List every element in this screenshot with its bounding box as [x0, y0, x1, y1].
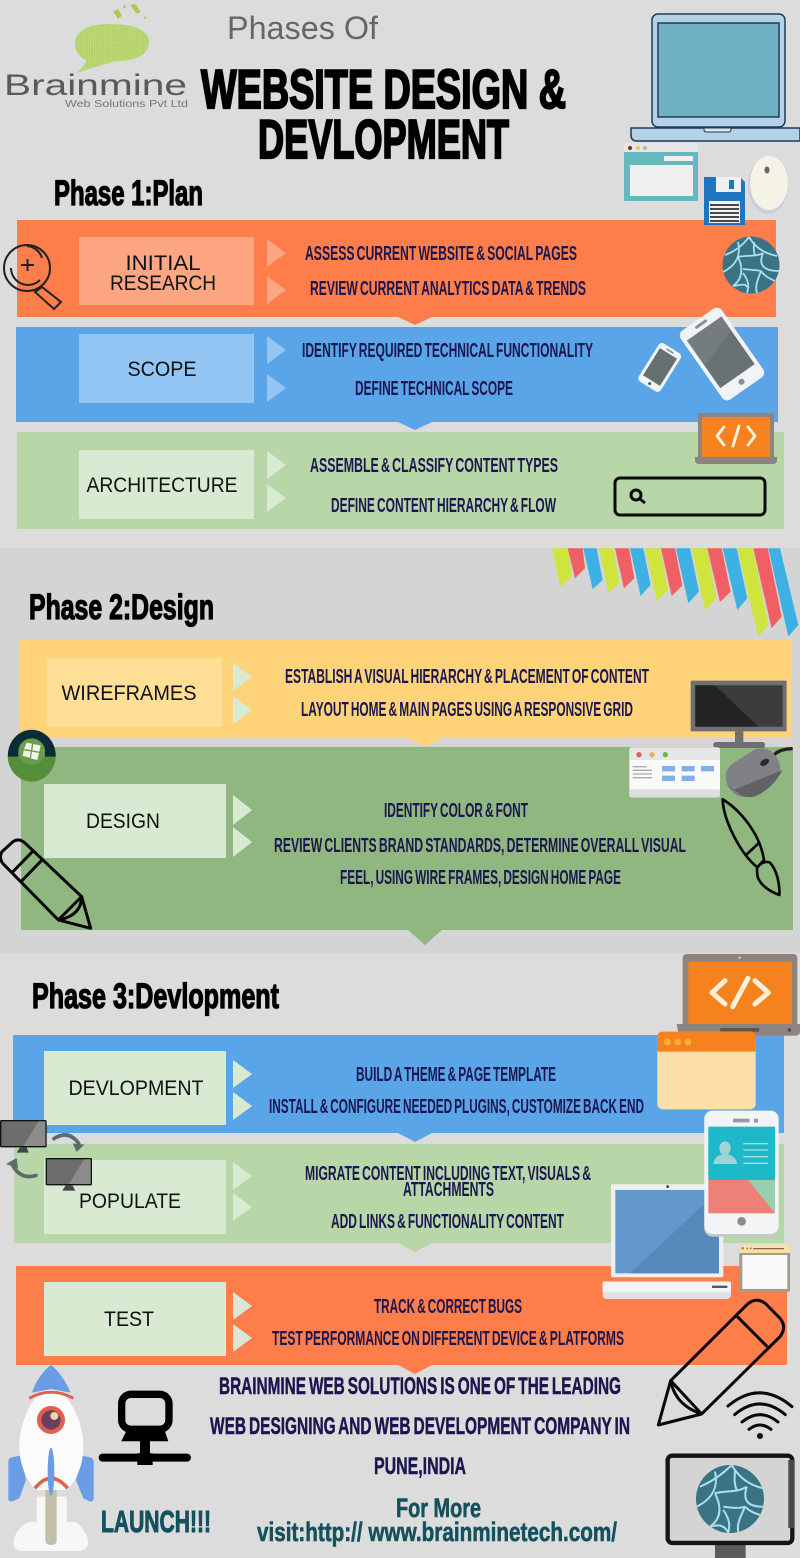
label: scope	[79, 334, 254, 403]
text: populate tasks: MIGRATE CONTENT INCLUDING TEXT, VISUALS &	[305, 1163, 591, 1185]
text: website link: visit:http:// www.brainminetech.com/	[257, 1517, 617, 1547]
icon: code laptop small	[695, 413, 777, 464]
title line: Phases Of: Phases Of	[227, 10, 378, 46]
panel: wireframes	[20, 640, 791, 747]
label: devlopment: DEVLOPMENT	[68, 1077, 204, 1100]
heading: Phase 2: Phase 2:Design	[29, 588, 214, 627]
icon: large pencil	[658, 1300, 784, 1425]
sync arrows	[6, 1135, 84, 1177]
text: populate tasks: ATTACHMENTS	[403, 1179, 494, 1201]
icon: desktop monitor	[691, 681, 787, 748]
title line: Devlopment: DEVLOPMENT	[258, 108, 509, 170]
text: test tasks	[272, 1296, 624, 1350]
first monitor	[0, 1120, 47, 1153]
text: research tasks	[305, 243, 586, 300]
panel: initial research	[17, 220, 776, 325]
label: architecture	[79, 450, 254, 519]
heading: Phase 1: Phase 1:Plan	[54, 174, 203, 213]
chevrons	[233, 1060, 252, 1120]
icon: floppy disk	[704, 177, 745, 225]
panel: architecture	[17, 432, 784, 529]
panel: populate	[14, 1144, 784, 1252]
icon: globe	[722, 236, 780, 294]
text: company blurb: PUNE,INDIA	[374, 1453, 466, 1480]
text: website link: For More	[396, 1493, 481, 1523]
panel: design	[21, 747, 793, 945]
icon: browser dashboard	[629, 747, 720, 797]
panel: test	[16, 1266, 787, 1374]
icon: blue laptop	[603, 1184, 731, 1299]
icon: syncing monitors	[0, 1120, 92, 1191]
text: architecture tasks: ASSEMBLE & CLASSIFY CONTENT TYPES	[310, 455, 558, 477]
text: devlopment tasks: BUILD A THEME & PAGE TEMPLATE	[356, 1064, 556, 1086]
text: scope tasks: DEFINE TECHNICAL SCOPE	[355, 378, 513, 400]
icon: mouse	[748, 156, 788, 214]
icon: contact phone	[704, 1111, 779, 1237]
icon: network computer	[99, 1394, 191, 1465]
chevrons	[233, 795, 252, 857]
panel: scope	[16, 327, 778, 430]
title	[201, 10, 566, 170]
text: architecture tasks	[310, 455, 558, 517]
label: populate: POPULATE	[79, 1190, 181, 1213]
logo: Brainmine	[4, 4, 188, 110]
label: scope: SCOPE	[128, 358, 196, 381]
text: scope tasks: IDENTIFY REQUIRED TECHNICAL FUNCTIONALITY	[302, 340, 593, 362]
icon: windows badge	[8, 730, 56, 782]
text: launch: LAUNCH!!!	[101, 1504, 211, 1539]
label: architecture: ARCHITECTURE	[86, 474, 238, 497]
text: website link	[257, 1493, 617, 1547]
icon: search box	[615, 478, 765, 515]
text: design tasks: IDENTIFY COLOR & FONT	[384, 800, 528, 822]
text: company blurb	[210, 1373, 630, 1480]
logo wordmark: Brainmine	[4, 69, 187, 102]
logo tagline: Web Solutions Pvt Ltd	[65, 99, 188, 110]
logo brain mark	[75, 4, 149, 73]
text: research tasks: REVIEW CURRENT ANALYTICS DATA & TRENDS	[310, 278, 586, 300]
title line: Website Design &: WEBSITE DESIGN &	[201, 58, 566, 120]
text: wireframe tasks	[285, 666, 649, 721]
text: populate tasks: ADD LINKS & FUNCTIONALITY CONTENT	[331, 1211, 564, 1233]
icon: wifi	[728, 1393, 792, 1439]
icon: orange browser window	[657, 1032, 756, 1109]
text: devlopment tasks	[269, 1064, 644, 1118]
label: initial research: INITIAL	[126, 252, 200, 275]
chevrons	[267, 336, 286, 402]
label: test: TEST	[104, 1308, 154, 1331]
icon: rocket	[8, 1365, 94, 1551]
label: populate	[44, 1160, 226, 1234]
label: design: DESIGN	[86, 810, 160, 833]
label: design	[44, 784, 226, 858]
icon: globe monitor	[668, 1456, 794, 1558]
chevrons	[267, 451, 286, 512]
label: initial research	[79, 237, 254, 305]
label: wireframes	[47, 658, 222, 727]
text: test tasks: TRACK & CORRECT BUGS	[374, 1296, 522, 1318]
chevrons	[233, 1292, 252, 1352]
heading: Phase 3: Phase 3:Devlopment	[32, 977, 279, 1016]
icon: computer mouse grey	[719, 742, 792, 804]
icon: small phone	[637, 341, 683, 393]
chevrons	[233, 1162, 252, 1221]
text: scope tasks	[302, 340, 593, 400]
label: test	[44, 1282, 226, 1356]
label: initial research: RESEARCH	[110, 272, 216, 295]
second monitor	[46, 1158, 92, 1191]
icon: paint brush	[723, 799, 779, 895]
panel: devlopment	[13, 1035, 784, 1142]
text: architecture tasks: DEFINE CONTENT HIERARCHY & FLOW	[331, 495, 556, 517]
icon: magnifier	[4, 245, 61, 309]
icon: tablet phone	[677, 305, 767, 403]
chevrons	[267, 239, 286, 304]
text: design tasks	[274, 800, 686, 889]
icon: small window	[739, 1245, 790, 1292]
chevrons	[233, 663, 252, 724]
icon: laptop top right	[631, 14, 800, 141]
text: populate tasks	[305, 1163, 591, 1233]
icon: pencil left	[0, 840, 91, 928]
label: devlopment	[44, 1051, 226, 1125]
text: research tasks: ASSESS CURRENT WEBSITE & SOCIAL PAGES	[305, 243, 577, 265]
decorative ribbon banner	[552, 548, 798, 637]
icon: browser window teal	[624, 143, 698, 201]
label: wireframes: WIREFRAMES	[62, 682, 196, 705]
icon: code laptop large	[677, 954, 800, 1036]
